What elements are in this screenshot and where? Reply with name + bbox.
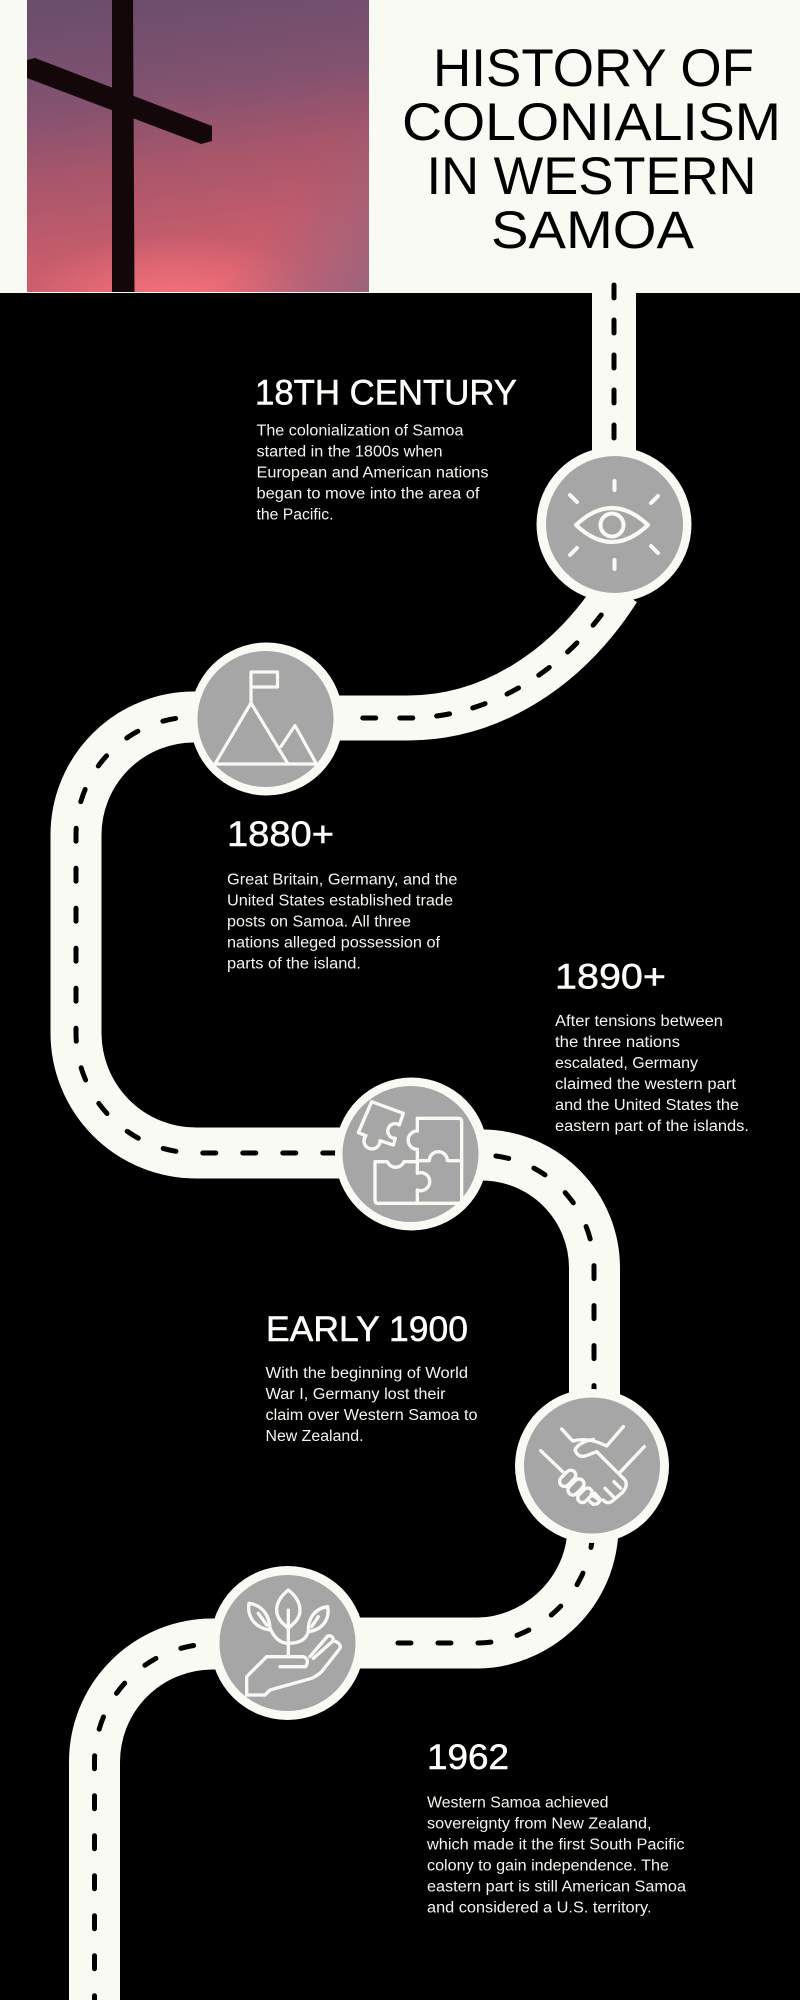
text block: 1880+: posts on Samoa. All three [227,914,411,930]
text block: 1880+ [227,815,458,972]
text block: 1890+: 1890+ [555,958,666,996]
icon: handshake [515,1389,669,1543]
text block: 1962: Western Samoa achieved [427,1794,608,1812]
text block: early 1900: With the beginning of World [266,1365,468,1382]
text block: 1962: and considered a U.S. territory. [427,1900,652,1916]
road with dashed centre line [76,285,618,2000]
text block: early 1900: EARLY 1900 [266,1310,468,1349]
text block: 18th century: 18TH CENTURY [255,374,517,412]
text block: 1880+: United States established trade [227,892,453,910]
text block: 1880+: parts of the island. [227,956,361,972]
title [402,39,781,260]
text block: early 1900: claim over Western Samoa to [266,1407,478,1424]
text block: 18th century: began to move into the area of [256,486,480,502]
text block: 1880+: 1880+ [227,815,334,854]
text block: 18th century: The colonialization of Samoa [256,422,464,440]
text block: 1962: which made it the first South Pacific [426,1836,685,1854]
icon: eye [536,447,692,602]
text block: 1962: colony to gain independence. The [427,1858,669,1874]
text block: early 1900: New Zealand. [266,1428,364,1445]
title: HISTORY OF [433,39,754,98]
text block: 1880+: Great Britain, Germany, and the [227,872,458,888]
title: SAMOA [491,201,695,260]
text block: early 1900 [266,1310,478,1445]
icon: hand with plant [210,1566,364,1720]
text block: 1962: 1962 [427,1738,509,1777]
text block: 1962: sovereignty from New Zealand, [427,1816,652,1832]
text block: early 1900: War I, Germany lost their [266,1386,446,1403]
text block: 1880+: nations alleged possession of [227,934,441,952]
text block: 1890+: and the United States the [555,1097,739,1114]
text block: 1890+: After tensions between [555,1013,723,1030]
text block: 1890+: eastern part of the islands. [555,1118,749,1135]
text block: 1890+: the three nations [555,1034,680,1051]
text block: 1890+: claimed the western part [555,1076,737,1093]
text block: 1890+ [555,958,749,1135]
text block: 1962 [426,1738,686,1916]
text block: 1962: eastern part is still American Samoa [427,1878,686,1896]
text block: 1890+: escalated, Germany [555,1055,698,1072]
text block: 18th century: the Pacific. [256,506,334,524]
icon: puzzle [335,1078,488,1230]
photo: cross at sunset [27,0,369,292]
text block: 18th century: started in the 1800s when [256,444,442,460]
title: COLONIALISM [402,93,781,152]
text block: 18th century [255,374,517,524]
title: IN WESTERN [426,147,756,206]
header background [0,0,800,293]
icon: mountain with flag [190,642,343,796]
text block: 18th century: European and American nations [256,464,489,482]
